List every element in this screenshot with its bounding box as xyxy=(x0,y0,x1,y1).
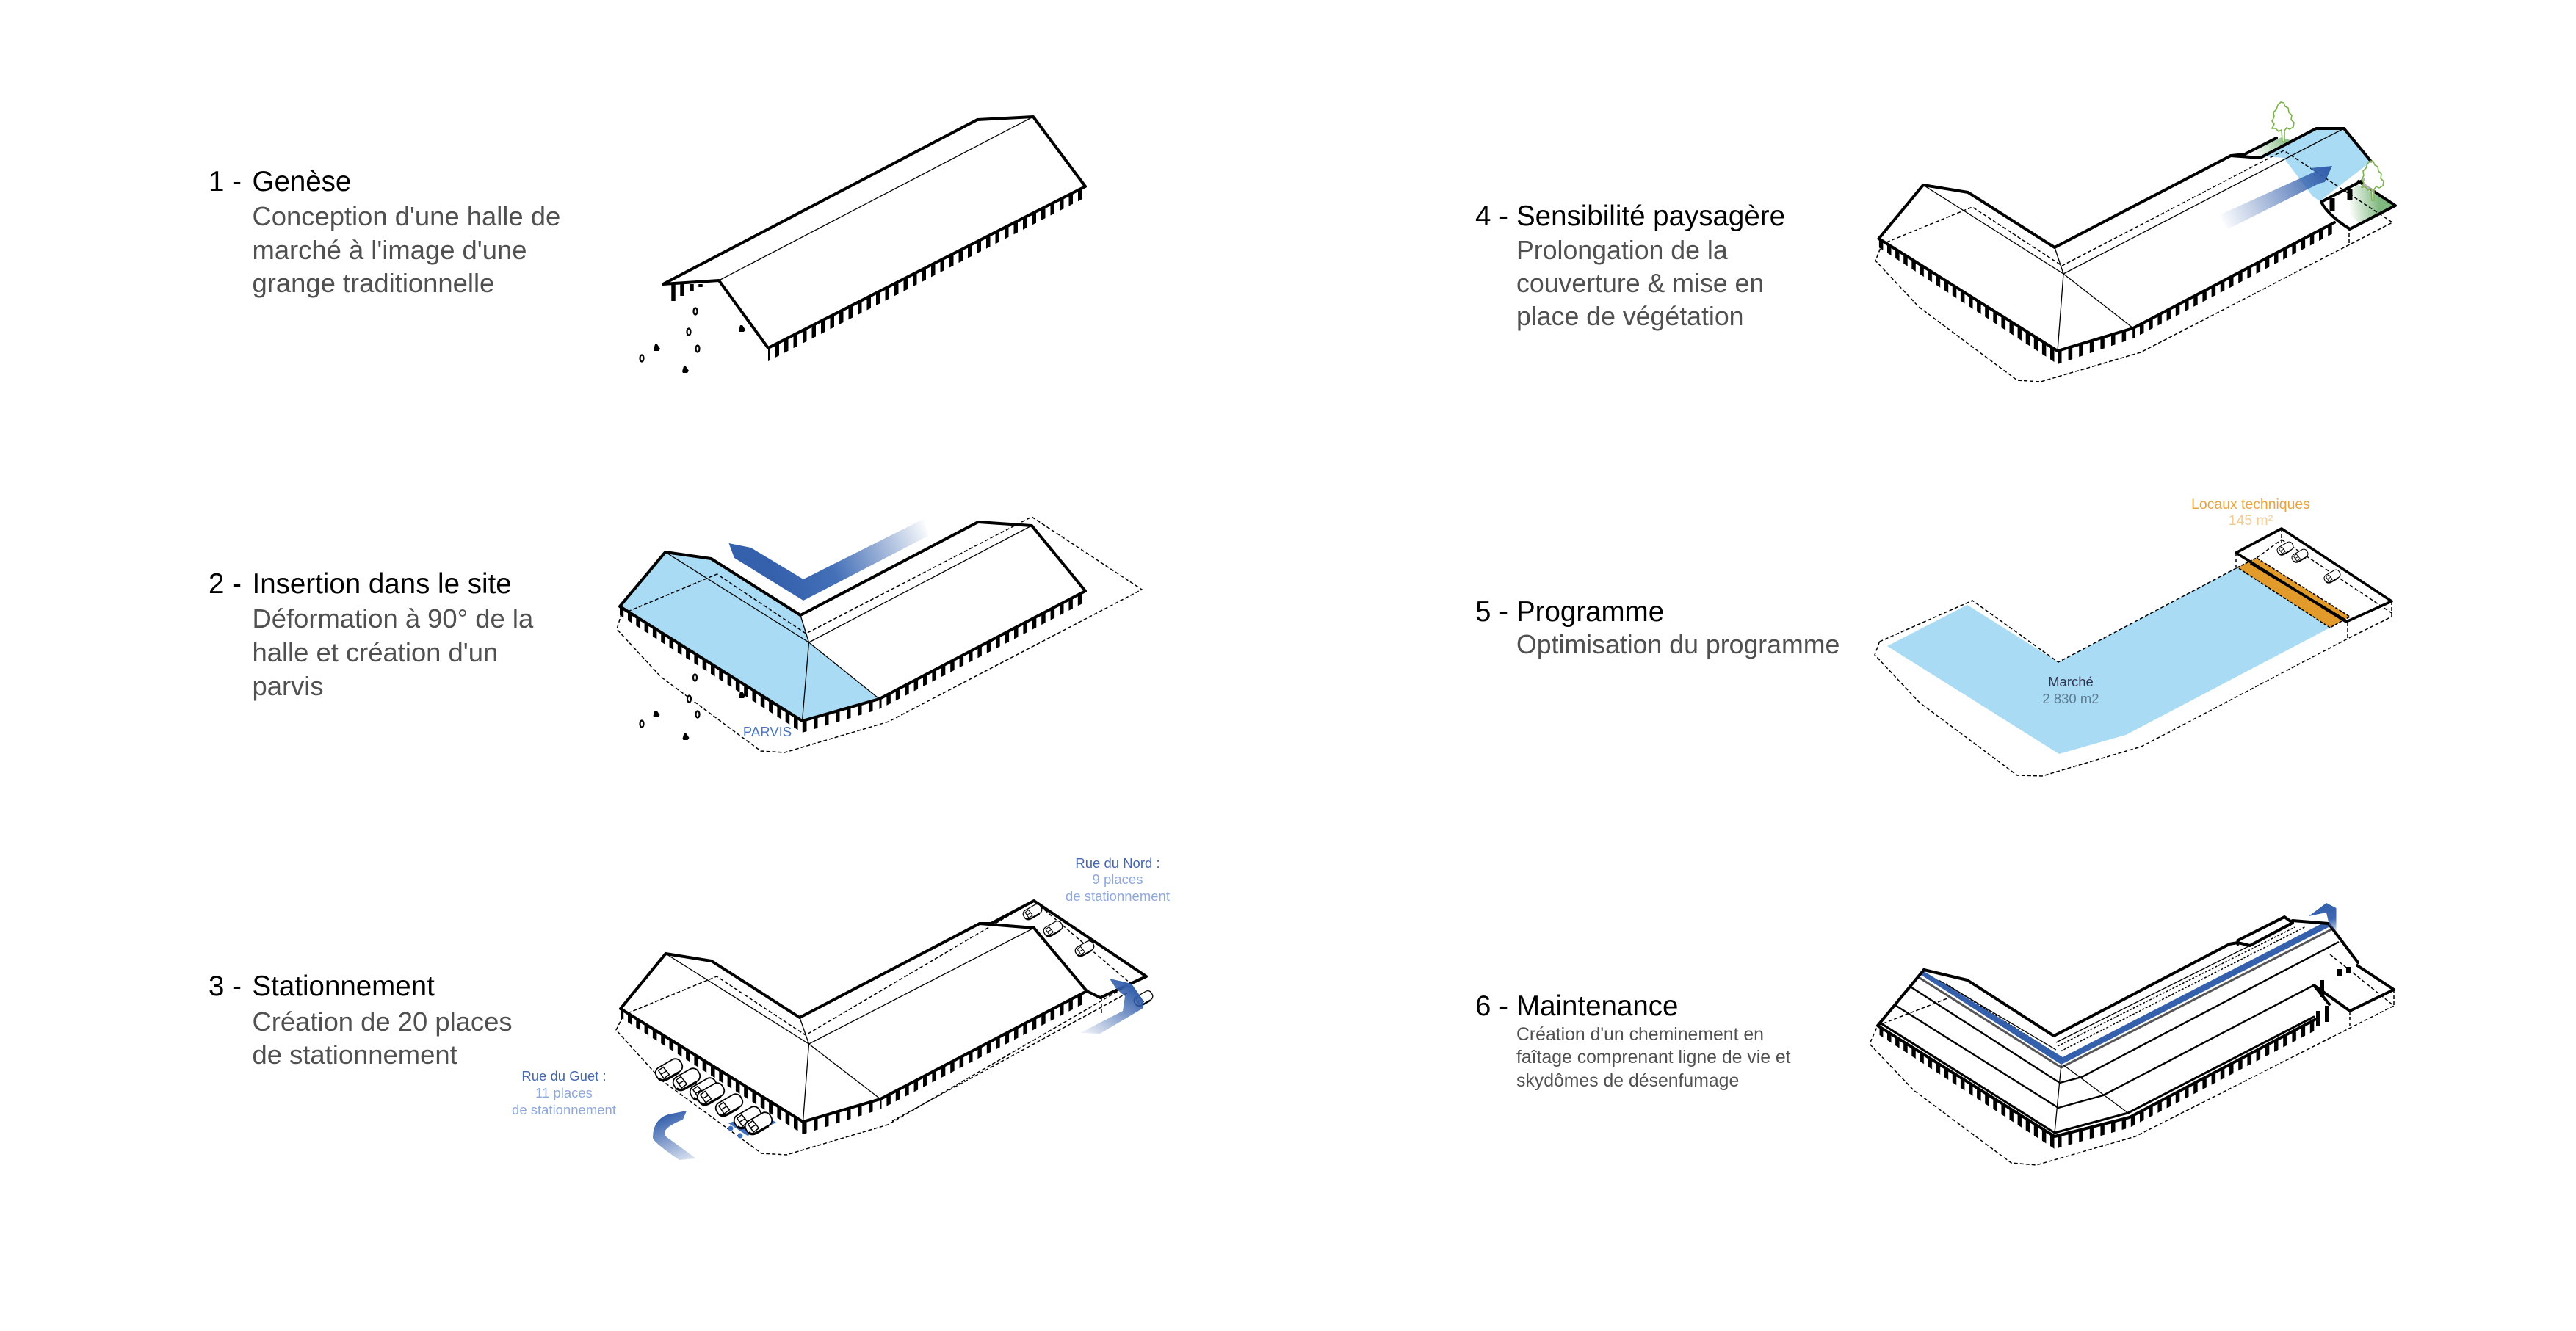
text: description 3: Création de 20 places xyxy=(253,1007,513,1037)
arrow: Rue du Guet access xyxy=(653,1111,696,1160)
text: description 5: Optimisation du programme xyxy=(1516,630,1839,659)
panel 2: Insertion dans le site xyxy=(209,517,1142,752)
label: Marché: 2 830 m2 xyxy=(2042,691,2099,706)
diagram: floor plan programme xyxy=(1875,529,2392,776)
heading: 2 - Insertion: Insertion dans le site xyxy=(253,568,512,600)
heading: 3 - Stationnement: Stationnement xyxy=(253,971,435,1002)
text: description 6: skydômes de désenfumage xyxy=(1516,1071,1739,1091)
label: Rue du Nord: 9 places xyxy=(1093,871,1143,887)
heading: 3 - Stationnement: 3 - xyxy=(209,971,242,1002)
heading: 1 - Genèse: 1 - xyxy=(209,166,242,197)
text: description 3: de stationnement xyxy=(253,1040,457,1070)
heading: 5 - Programme: 5 - xyxy=(1475,596,1508,628)
text: description 2: Déformation à 90° de la xyxy=(253,603,534,634)
text: description 4: couverture & mise en xyxy=(1516,269,1764,298)
text: description 1: marché à l'image d'une xyxy=(253,235,527,265)
label: Locaux techniques: Locaux techniques xyxy=(2191,496,2310,512)
label: PARVIS: PARVIS xyxy=(743,724,792,739)
heading: 6 - Maintenance: Maintenance xyxy=(1516,990,1678,1022)
heading: 2 - Insertion: 2 - xyxy=(209,568,242,600)
label: Rue du Nord: Rue du Nord : xyxy=(1075,855,1160,871)
arrow: rotation gradient xyxy=(728,519,928,601)
diagram: building bent at 90 degrees with parvis xyxy=(617,517,1142,752)
label: Rue du Nord: de stationnement xyxy=(1066,888,1170,904)
arrow: extension direction xyxy=(2219,166,2332,229)
heading: 4 - Sensibilité paysagère: Sensibilité paysagère xyxy=(1516,200,1785,232)
label: Locaux techniques: 145 m² xyxy=(2229,512,2273,529)
text: description 6: Création d'un cheminement en xyxy=(1516,1025,1764,1045)
arrow: ridge access xyxy=(2309,903,2337,932)
label: Rue du Guet: 11 places xyxy=(535,1085,593,1100)
panel 3: Stationnement xyxy=(209,855,1170,1160)
diagram: extended roof and vegetation xyxy=(1875,102,2395,382)
panel 1: Genèse xyxy=(209,117,1085,373)
label: Marché: Marché xyxy=(2048,674,2094,689)
diagram: building with parking xyxy=(616,901,1154,1155)
arrow: Rue du Nord access xyxy=(1080,979,1143,1034)
diagram: roof with ridge walkway xyxy=(1870,917,2394,1165)
heading: 6 - Maintenance: 6 - xyxy=(1475,990,1508,1022)
text: description 4: place de végétation xyxy=(1516,302,1744,331)
text: description 2: halle et création d'un xyxy=(253,637,498,667)
text: description 1: Conception d'une halle de xyxy=(253,201,560,231)
heading: 4 - Sensibilité paysagère: 4 - xyxy=(1475,200,1508,232)
heading: 5 - Programme: Programme xyxy=(1516,596,1664,628)
diagram: initial barn roof xyxy=(640,117,1085,373)
heading: 1 - Genèse: Genèse xyxy=(253,166,351,197)
text: description 2: parvis xyxy=(253,671,324,701)
text: description 1: grange traditionnelle xyxy=(253,268,494,298)
panel 6: Maintenance xyxy=(1475,903,2394,1165)
label: Rue du Guet: de stationnement xyxy=(512,1102,616,1117)
parking bay highlight xyxy=(728,1112,776,1138)
text: description 4: Prolongation de la xyxy=(1516,236,1728,265)
text: description 6: faîtage comprenant ligne de vie et xyxy=(1516,1048,1791,1067)
label: Rue du Guet: Rue du Guet : xyxy=(521,1068,607,1084)
panel 4: Sensibilité paysagère xyxy=(1475,102,2395,382)
icons: trees xyxy=(2272,102,2384,200)
panel 5: Programme xyxy=(1475,496,2392,776)
